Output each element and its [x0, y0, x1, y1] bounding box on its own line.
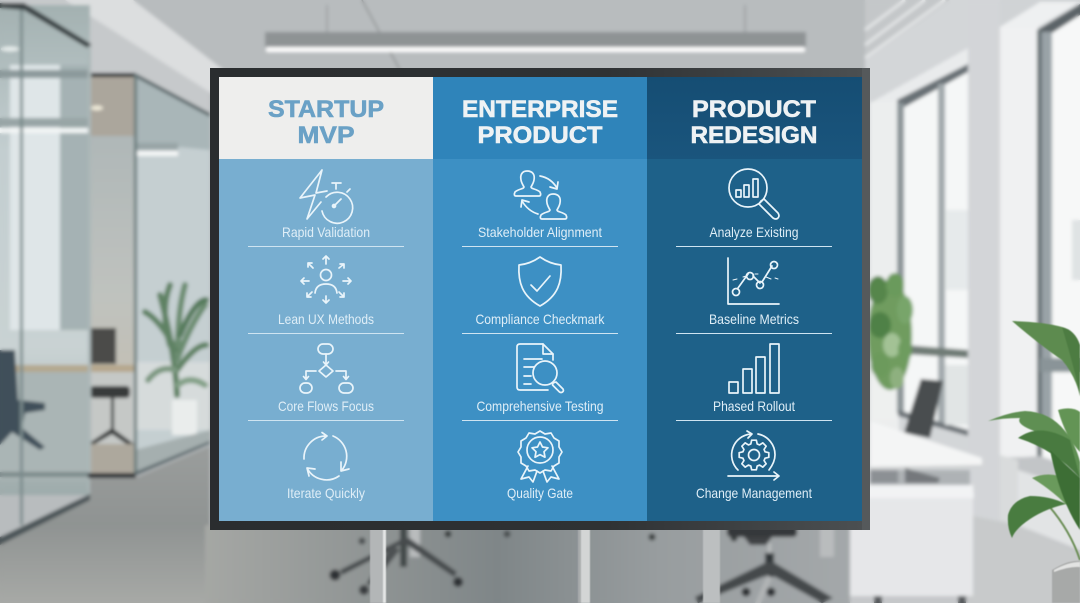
icon: shield with checkmark: [519, 257, 561, 306]
ceiling light: [265, 5, 806, 52]
icon: gear with cycle arrow: [728, 431, 779, 480]
icon: line chart with axes: [728, 258, 779, 304]
heading band: product redesign: REDESIGN: [690, 122, 818, 149]
middle office room: [88, 76, 136, 476]
desk chair back: [904, 379, 943, 438]
label: Rapid Validation: Rapid Validation: [282, 224, 370, 240]
right glass wall with palm: [135, 73, 210, 472]
icon: flowchart: [300, 344, 353, 393]
display board: [210, 68, 870, 530]
label: Phased Rollout: Phased Rollout: [713, 398, 795, 414]
label: Change Management: Change Management: [696, 485, 812, 501]
label: Quality Gate: Quality Gate: [507, 485, 573, 501]
icon: cycle arrows: [304, 432, 349, 480]
heading band: product redesign: [647, 77, 862, 159]
foreground plant, bottom right: [988, 321, 1080, 603]
heading band: startup MVP: MVP: [298, 122, 354, 149]
floor: [0, 446, 210, 603]
icon: document with magnifier: [517, 344, 563, 392]
board stand legs: [370, 525, 720, 603]
label: Compliance Checkmark: Compliance Checkmark: [476, 311, 605, 327]
label: Analyze Existing: Analyze Existing: [710, 224, 798, 240]
heading band: product redesign: PRODUCT: [692, 96, 816, 123]
icon: award rosette: [518, 431, 562, 482]
icon: magnifier with bars: [729, 169, 779, 219]
icon: stakeholders with arrows: [514, 171, 567, 219]
white cabinet: [850, 485, 974, 603]
icon: lightning and stopwatch: [300, 170, 353, 223]
label: Comprehensive Testing: Comprehensive Testing: [476, 398, 604, 414]
panel: product redesign: [647, 77, 862, 521]
panel: startup MVP: [219, 77, 433, 521]
heading band: startup MVP: STARTUP: [268, 96, 384, 123]
right wall and windows: [865, 0, 1080, 603]
panel: enterprise product: [433, 77, 647, 521]
white desk: [870, 421, 982, 485]
heading band: enterprise product: PRODUCT: [478, 122, 603, 149]
board frame: [210, 68, 870, 530]
heading band: enterprise product: [433, 77, 647, 159]
label: Baseline Metrics: Baseline Metrics: [709, 311, 799, 327]
label: Core Flows Focus: Core Flows Focus: [278, 398, 374, 414]
heading band: enterprise product: ENTERPRISE: [462, 96, 618, 123]
mid plant behind desk: [868, 273, 913, 420]
heading band: startup MVP: [219, 77, 433, 159]
icon: rising bars: [729, 344, 779, 393]
left glass meeting room: [0, 5, 135, 525]
label: Iterate Quickly: Iterate Quickly: [287, 485, 365, 501]
label: Lean UX Methods: Lean UX Methods: [278, 311, 374, 327]
label: Stakeholder Alignment: Stakeholder Alignment: [478, 224, 602, 240]
chairs below the board: [330, 525, 834, 603]
icon: person with arrows: [301, 256, 351, 303]
